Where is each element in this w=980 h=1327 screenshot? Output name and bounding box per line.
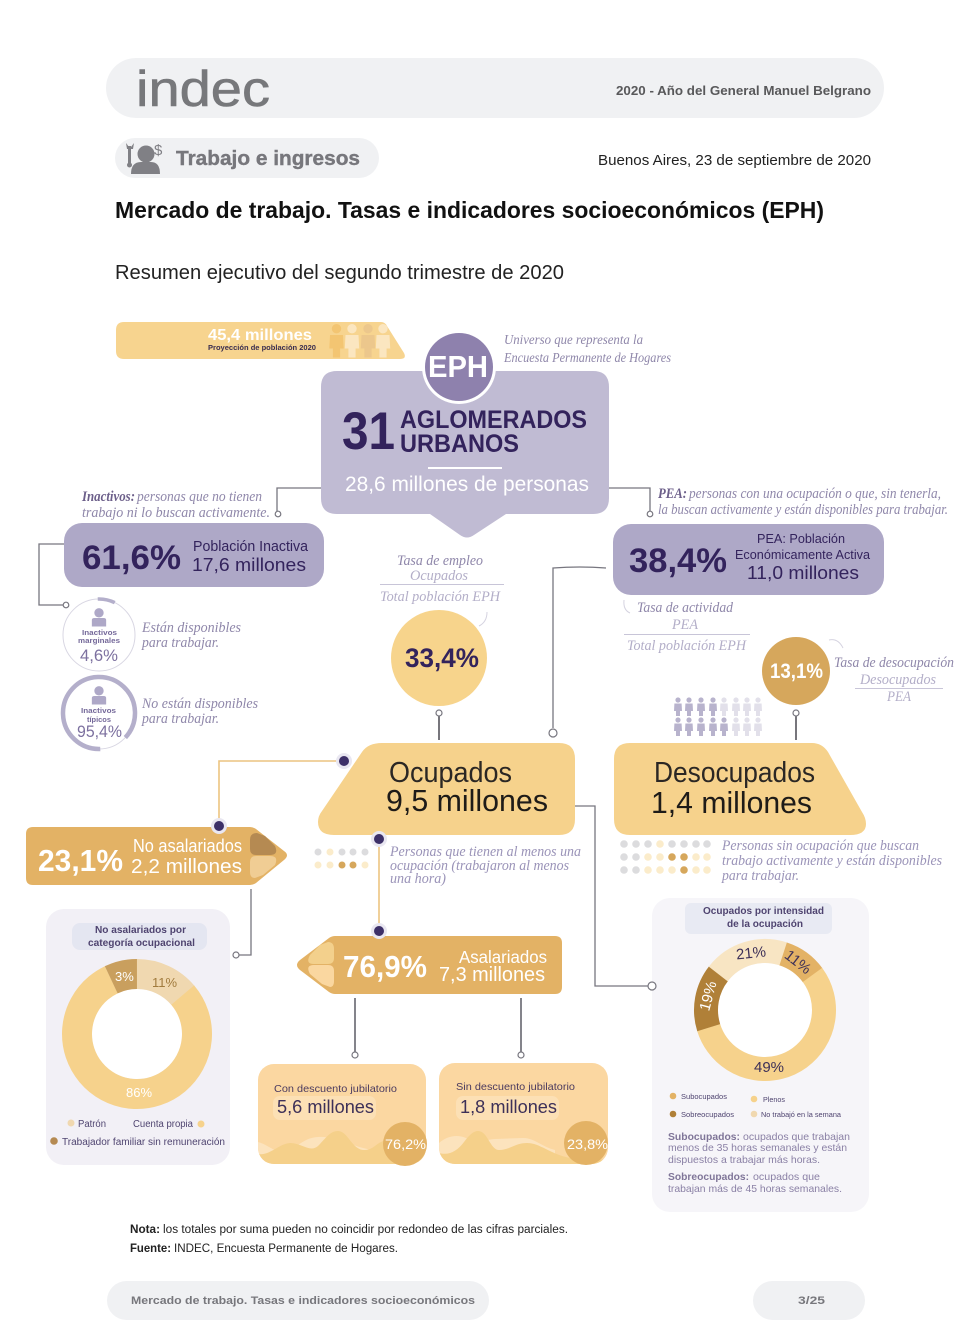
definitions: subocupados y sobreocupados <box>668 1131 850 1195</box>
panel: desocupados <box>614 743 866 835</box>
formula: tasa de empleo: Tasa de empleo <box>397 553 483 569</box>
legend: intensidad: Plenos <box>763 1097 786 1104</box>
gauge: inactivos marginales: marginales <box>78 636 120 645</box>
gauge: inactivos típicos: típicos <box>87 715 111 724</box>
legend: intensidad: No trabajó en la semana <box>761 1112 841 1119</box>
definitions: subocupados y sobreocupados: trabajan más de 45 horas semanales. <box>668 1183 842 1195</box>
notes: nota y fuente: los totales por suma pueden no coincidir por redondeo de las cifras parciales. <box>163 1224 568 1236</box>
note: universo EPH <box>503 333 671 366</box>
population banner <box>116 322 405 359</box>
panel: no asalariados: 23,1% <box>38 843 123 878</box>
pencil tip: lower segment <box>308 965 334 987</box>
notes: nota y fuente: Nota: <box>130 1224 160 1236</box>
formula: tasa de actividad: PEA <box>671 617 699 633</box>
panel: población inactiva <box>64 523 324 587</box>
panel: ocupados por intensidad: 11% <box>781 947 814 978</box>
dot matrix: ocupados <box>314 848 368 868</box>
description: ocupados: Personas que tienen al menos una <box>389 844 581 860</box>
gauge: inactivos típicos: 95,4% <box>77 722 122 741</box>
panel: asalariados <box>297 936 562 994</box>
formula: tasa de empleo <box>380 553 504 626</box>
connector: no asalariados to chart <box>233 889 251 958</box>
legend: categoría: Cuenta propia <box>133 1119 193 1130</box>
panel: ocupados por intensidad: de la ocupación <box>727 918 803 930</box>
gauge: inactivos marginales: Inactivos <box>82 628 117 637</box>
pencil tip: dark segment <box>250 833 276 855</box>
panel: PEA <box>613 524 884 595</box>
date: Buenos Aires, 23 de septiembre de 2020 <box>598 153 871 169</box>
panel: asalariados: Asalariados <box>459 947 547 967</box>
formula: tasa de empleo: Ocupados <box>410 568 468 584</box>
population banner: 45,4 millones <box>208 327 312 344</box>
header motto: 2020 - Año del General Manuel Belgrano <box>616 83 871 98</box>
legend: categoría <box>50 1119 225 1148</box>
formula: tasa de actividad: Tasa de actividad <box>637 600 733 616</box>
formula: tasa de desocupación: PEA <box>886 689 912 705</box>
card: sin descuento jubilatorio <box>439 1063 610 1170</box>
notes: nota y fuente: Fuente: <box>130 1243 171 1255</box>
formula: tasa de actividad: Total población EPH <box>627 638 747 654</box>
panel: no asalariados por categoría: 11% <box>152 975 177 990</box>
card: sin descuento jubilatorio: 1,8 millones <box>460 1097 557 1117</box>
card: con descuento jubilatorio: Con descuento jubilatorio <box>274 1083 397 1095</box>
panel: ocupados por intensidad: 19% <box>696 979 721 1013</box>
card: con descuento jubilatorio <box>258 1064 430 1170</box>
pencil tip: light segment <box>250 856 276 878</box>
icon: four people <box>329 324 390 358</box>
donut chart: intensidad <box>682 927 848 1093</box>
badge: EPH <box>422 330 496 404</box>
card: sin descuento jubilatorio: 23,8% <box>567 1136 608 1152</box>
legend: categoría: Patrón <box>78 1119 106 1130</box>
formula: tasa de desocupación: Tasa de desocupación <box>834 655 954 671</box>
dot matrix: desocupados <box>620 840 711 874</box>
note: están disponibles <box>141 620 241 651</box>
card: con descuento jubilatorio: 76,2% <box>385 1136 426 1152</box>
footer: page number <box>753 1281 865 1320</box>
connector: to PEA <box>609 488 653 517</box>
definitions: subocupados y sobreocupados: ocupados que trabajan <box>743 1131 850 1143</box>
card: sin descuento jubilatorio: Sin descuento jubilatorio <box>456 1081 575 1093</box>
formula: tasa de desocupación: Desocupados <box>859 672 936 688</box>
panel: PEA: PEA: Población <box>757 532 845 546</box>
connector: ocupados to asalariados <box>378 839 380 931</box>
connector: empleo to ocupados <box>436 710 442 740</box>
definition: PEA: PEA: <box>658 486 687 502</box>
note: están disponibles: para trabajar. <box>141 635 219 651</box>
definitions: subocupados y sobreocupados: Subocupados: <box>668 1131 740 1143</box>
metric: tasa de empleo 33,4%: 33,4% <box>405 643 479 673</box>
definition: inactivos: Inactivos: <box>81 489 135 505</box>
description: desocupados: para trabajar. <box>721 868 799 884</box>
panel: no asalariados por categoría <box>46 909 230 1165</box>
connector: to inactivos marginales <box>39 544 69 608</box>
connector: PEA to ocupados <box>549 567 606 737</box>
connector: to sin descuento <box>518 998 524 1058</box>
formula: tasa de desocupación <box>829 640 954 705</box>
panel: desocupados: 1,4 millones <box>651 785 812 820</box>
panel: asalariados: 7,3 millones <box>439 964 545 986</box>
panel: ocupados <box>318 743 575 835</box>
note: están disponibles: Están disponibles <box>141 620 241 636</box>
formula: tasa de actividad <box>624 600 750 654</box>
note: no están disponibles: para trabajar. <box>141 711 219 727</box>
formula: tasa de empleo: Total población EPH <box>380 589 501 605</box>
note: universo EPH: Encuesta Permanente de Hogares <box>503 351 671 366</box>
legend: intensidad: Subocupados <box>681 1094 728 1101</box>
description: ocupados: una hora) <box>390 871 446 887</box>
metric: tasa de desocupación 13,1% <box>762 637 830 705</box>
connector: to inactivos <box>275 488 321 517</box>
panel: 31 aglomerados urbanos: URBANOS <box>400 430 519 458</box>
section name: Trabajo e ingresos <box>176 148 360 170</box>
icon: worker with wrench and dollar: $ <box>154 142 163 159</box>
node: ocupados bottom <box>371 831 387 847</box>
metric: tasa de desocupación 13,1%: 13,1% <box>770 660 823 683</box>
definition: inactivos: trabajo ni lo buscan activamente. <box>82 505 270 521</box>
description: desocupados: Personas sin ocupación que buscan <box>721 838 919 854</box>
donut chart: categoría <box>52 949 222 1119</box>
panel: ocupados por intensidad: 49% <box>754 1059 784 1076</box>
note: universo EPH: Universo que representa la <box>504 333 643 348</box>
node: no asalariados <box>211 818 227 834</box>
panel: no asalariados <box>26 827 287 885</box>
icon: people rows <box>674 697 762 736</box>
subtitle: Resumen ejecutivo del segundo trimestre de 2020 <box>115 262 564 284</box>
description: desocupados: trabajo activamente y están disponibles <box>722 853 942 869</box>
definition: PEA: personas con una ocupación o que, sin tenerla, <box>688 486 941 502</box>
description: ocupados <box>389 844 581 887</box>
definitions: subocupados y sobreocupados: menos de 35 horas semanales y están <box>668 1142 847 1154</box>
legend: intensidad <box>670 1093 841 1119</box>
panel: no asalariados por categoría: categoría ocupacional <box>88 937 195 949</box>
panel: PEA: Económicamente Activa <box>735 548 870 562</box>
panel: 31 aglomerados urbanos: 31 <box>342 402 395 461</box>
connector: ocupados to no asalariados <box>219 761 344 826</box>
title: Mercado de trabajo. Tasas e indicadores socioeconómicos (EPH) <box>115 197 824 223</box>
panel: desocupados: Desocupados <box>654 757 815 789</box>
panel: PEA: 11,0 millones <box>747 562 859 583</box>
panel: no asalariados: 2,2 millones <box>131 856 242 878</box>
definition: inactivos: personas que no tienen <box>136 489 262 505</box>
population banner: Proyección de población 2020 <box>208 345 316 352</box>
definition: PEA <box>658 486 948 518</box>
pencil tip: upper segment <box>308 942 334 964</box>
gauge: inactivos marginales <box>62 598 136 672</box>
panel: población inactiva: Población Inactiva <box>193 539 309 555</box>
gauge: inactivos típicos <box>62 676 136 750</box>
icon: worker with wrench and dollar <box>126 142 163 174</box>
metric: tasa de empleo 33,4% <box>391 610 487 706</box>
note: no están disponibles: No están disponibles <box>141 696 258 712</box>
connector: to con descuento <box>352 998 358 1058</box>
panel: 31 aglomerados urbanos: 28,6 millones de personas <box>345 473 589 496</box>
definition: inactivos <box>81 489 270 521</box>
footer: page number: 3/25 <box>798 1295 825 1307</box>
panel: 31 aglomerados urbanos <box>321 371 609 538</box>
definitions: subocupados y sobreocupados: dispuestos a trabajar más horas. <box>668 1154 820 1166</box>
panel: PEA: 38,4% <box>629 542 727 580</box>
connector: desocupación to desocupados <box>793 710 799 740</box>
footer: document title <box>107 1281 489 1320</box>
node: ocupados left <box>336 753 352 769</box>
header bar <box>106 58 884 118</box>
gauge: inactivos típicos: Inactivos <box>81 706 116 715</box>
panel: no asalariados por categoría: 3% <box>115 969 134 984</box>
panel: población inactiva: 61,6% <box>82 539 181 577</box>
panel: ocupados: Ocupados <box>389 757 512 789</box>
panel: no asalariados por categoría: 86% <box>126 1085 152 1100</box>
footer: document title: Mercado de trabajo. Tasas e indicadores socioeconómicos <box>131 1295 475 1307</box>
connector: ocupados to intensity panel <box>575 806 656 990</box>
panel: 31 aglomerados urbanos: AGLOMERADOS <box>400 406 587 434</box>
legend: categoría: Trabajador familiar sin remuneración <box>62 1137 225 1148</box>
section pill: Trabajo e ingresos <box>115 138 379 178</box>
badge: EPH: EPH <box>428 349 488 384</box>
gauge: inactivos marginales: 4,6% <box>80 646 118 665</box>
panel: ocupados por intensidad: 21% <box>735 943 767 964</box>
description: ocupados: ocupación (trabajaron al menos <box>390 858 569 874</box>
definitions: subocupados y sobreocupados: Sobreocupados: <box>668 1171 749 1183</box>
panel: no asalariados por categoría: No asalariados por <box>95 924 186 936</box>
node: asalariados <box>371 923 387 939</box>
notes: nota y fuente: INDEC, Encuesta Permanente de Hogares. <box>174 1243 398 1255</box>
legend: intensidad: Sobreocupados <box>681 1112 735 1119</box>
logo: indec: indec <box>136 61 270 117</box>
panel: población inactiva: 17,6 millones <box>192 554 306 575</box>
panel: ocupados por intensidad <box>652 898 869 1212</box>
panel: ocupados: 9,5 millones <box>386 783 548 818</box>
panel: asalariados: 76,9% <box>343 949 427 984</box>
note: no están disponibles <box>141 696 258 727</box>
description: desocupados <box>721 838 942 884</box>
notes: nota y fuente <box>130 1224 568 1255</box>
panel: no asalariados: No asalariados <box>133 836 242 856</box>
definitions: subocupados y sobreocupados: ocupados que <box>753 1171 820 1183</box>
card: con descuento jubilatorio: 5,6 millones <box>277 1097 374 1117</box>
panel: ocupados por intensidad: Ocupados por intensidad <box>703 905 824 917</box>
